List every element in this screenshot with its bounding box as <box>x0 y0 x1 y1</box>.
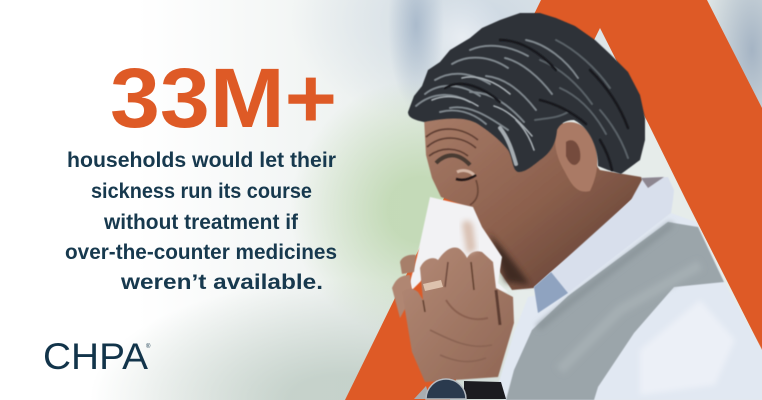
body copy: over-the-counter medicines <box>65 241 337 264</box>
body copy <box>65 149 337 294</box>
finger gaps and veins <box>423 262 500 362</box>
man sneezing into tissue <box>392 13 762 400</box>
inner ear <box>566 140 580 165</box>
shirt shoulder and sleeve <box>497 213 762 400</box>
watch strap <box>464 381 506 399</box>
watch face <box>426 379 466 399</box>
orange angular band <box>345 0 762 400</box>
wedding ring <box>423 280 443 291</box>
CHPA logo: ® <box>146 343 151 350</box>
body copy: weren’t available. <box>120 271 323 294</box>
shirt cuff <box>414 386 430 399</box>
palm and knuckles <box>402 247 514 382</box>
body copy: without treatment if <box>103 211 299 234</box>
hair <box>408 13 645 174</box>
fingertip pressed under tissue <box>462 220 476 254</box>
striped shirt collar <box>534 177 674 313</box>
body copy: households would let their <box>67 149 336 172</box>
neck and face <box>424 112 648 290</box>
body copy: sickness run its course <box>91 180 312 203</box>
grey sweater vest <box>506 222 724 400</box>
forehead wrinkles, brow and eye <box>426 129 478 205</box>
rear fingers <box>400 255 416 274</box>
hand holding tissue <box>392 247 514 382</box>
headline stat: 33M+ <box>110 51 337 145</box>
tissue <box>410 197 508 292</box>
sleeve highlight <box>640 300 735 395</box>
hair strands <box>416 40 628 170</box>
CHPA logo: CHPA <box>43 336 148 377</box>
vest shading <box>538 224 700 370</box>
under collar <box>641 177 664 188</box>
collar shadow <box>534 272 568 313</box>
ear <box>555 122 597 192</box>
face shadow near nose and chin <box>488 232 530 285</box>
